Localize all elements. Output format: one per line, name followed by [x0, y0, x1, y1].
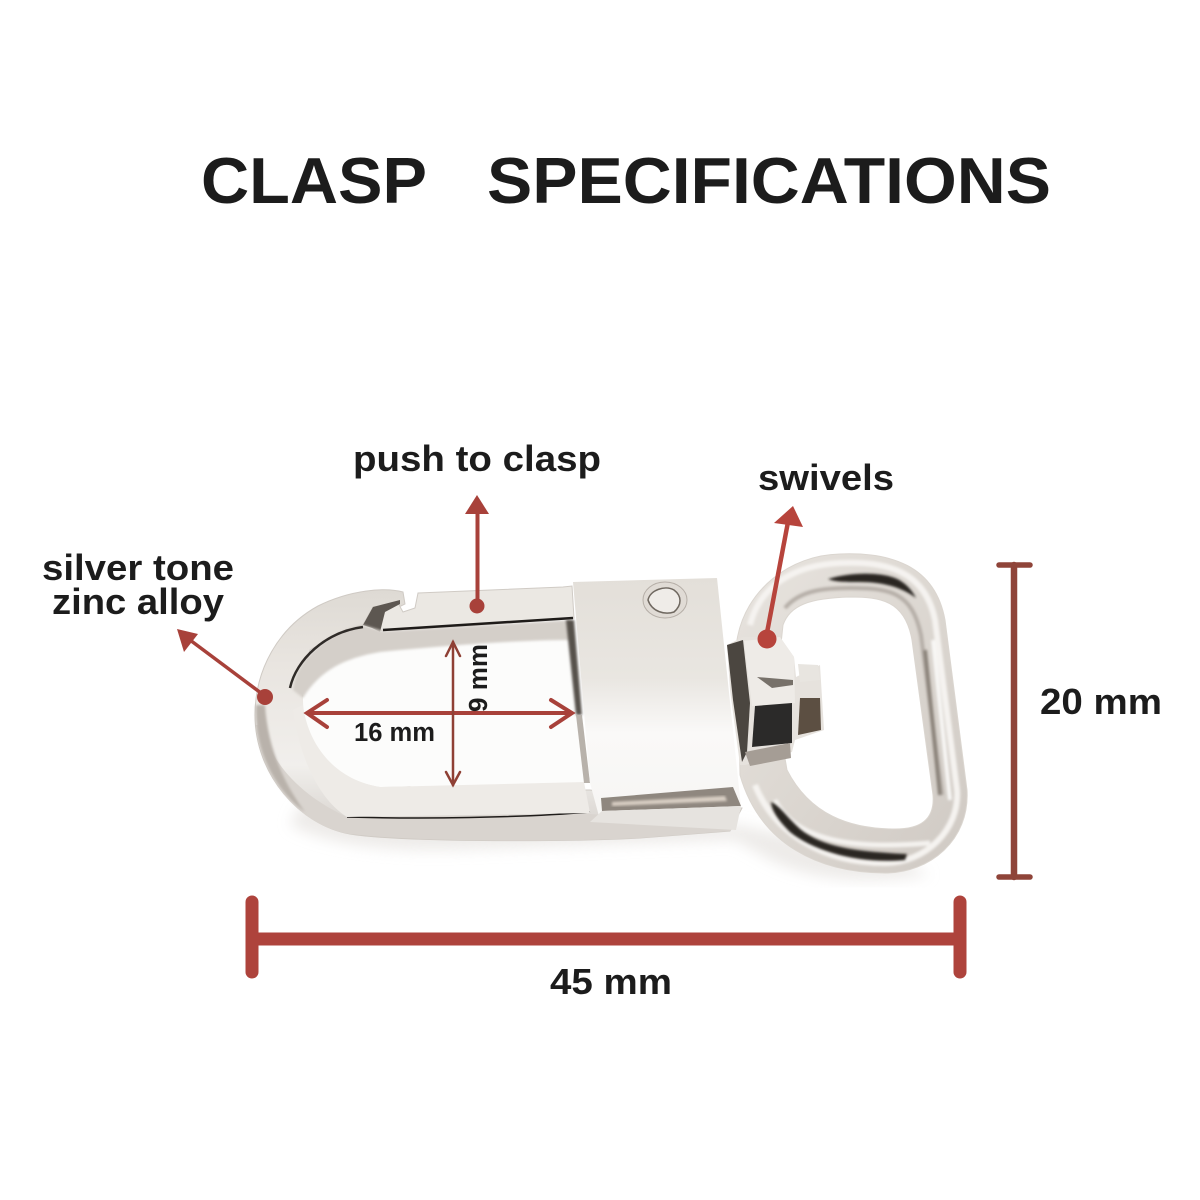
- arrow: [758, 506, 803, 648]
- swivel neck: [727, 637, 824, 766]
- label: [42, 547, 234, 622]
- label: 45 mm: [550, 961, 672, 1002]
- hook bottom edge: [347, 812, 590, 818]
- illustration: metal swivel clasp: [255, 554, 967, 880]
- clasp hook body: [255, 590, 742, 841]
- spring gate: [363, 586, 574, 631]
- label: zinc alloy: [52, 581, 224, 622]
- callout: swivels: [758, 457, 894, 648]
- hook outer left shading: [256, 705, 305, 812]
- hook opening: [303, 628, 584, 787]
- title: SPECIFICATIONS: [487, 144, 1051, 217]
- callout: push to clasp: [353, 438, 601, 614]
- label: 20 mm: [1040, 681, 1162, 722]
- label: swivels: [758, 457, 894, 498]
- hook lower shading: [256, 725, 736, 841]
- rivet: [643, 582, 687, 618]
- dimension: 9 mm: [446, 642, 493, 785]
- arrow: [307, 700, 572, 727]
- hook inner rim line: [290, 627, 363, 688]
- dimension: 16 mm: [307, 700, 572, 747]
- soft shadow: [290, 805, 930, 880]
- bracket: [999, 565, 1030, 877]
- gate lower edge: [383, 618, 573, 630]
- arrow: [446, 642, 460, 785]
- bracket: [252, 902, 960, 972]
- ring highlights: [750, 563, 957, 863]
- hook inner rim shading: [293, 620, 572, 698]
- block bottom bevel: [601, 787, 741, 811]
- label: push to clasp: [353, 438, 601, 479]
- title: [201, 144, 1051, 217]
- label: 16 mm: [354, 719, 435, 747]
- opening right shading: [566, 620, 582, 715]
- arrow: [465, 495, 489, 614]
- lower hook band: [293, 705, 590, 817]
- gate latch detail: [363, 600, 400, 632]
- D ring: [737, 554, 967, 873]
- ring dark reflections: [828, 574, 916, 598]
- label: silver tone: [42, 547, 234, 588]
- label: 9 mm: [465, 644, 493, 712]
- metal block with rivet: [573, 578, 741, 830]
- arrow: [177, 629, 273, 705]
- title: CLASP: [201, 144, 427, 217]
- callout: silver tone zinc alloy: [42, 547, 273, 705]
